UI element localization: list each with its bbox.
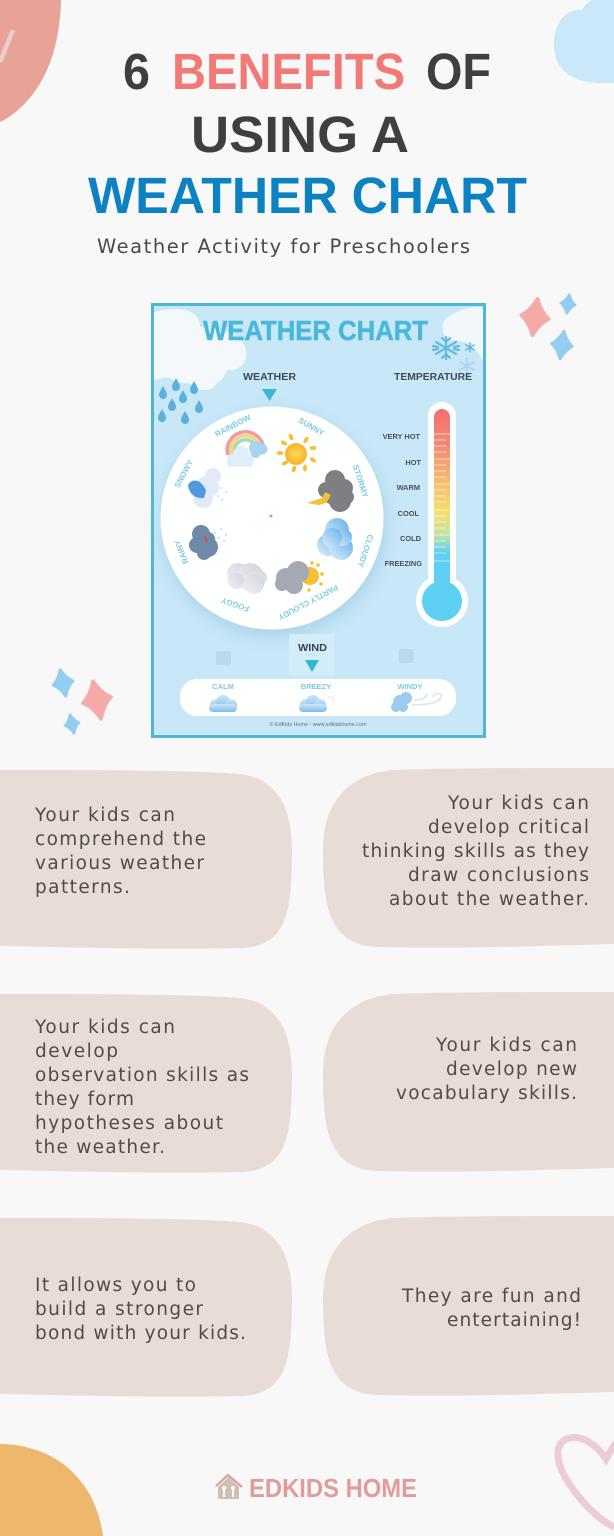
card 2: critical thinking: about the weather. <box>389 889 589 910</box>
wheel label: rainbow: RAINBOW <box>213 412 253 439</box>
panel: weather chart poster <box>152 304 484 736</box>
label: weather: WEATHER <box>243 372 297 383</box>
temperature scale labels: HOT <box>405 458 421 467</box>
card 1: weather patterns: comprehend the <box>35 829 206 850</box>
icon: sun <box>276 433 317 473</box>
wind strip <box>180 679 456 716</box>
icon: windy cloud <box>391 692 441 712</box>
card 6: fun and entertaining <box>323 1216 614 1396</box>
temperature scale labels: WARM <box>397 483 420 492</box>
card 5: stronger bond: bond with your kids. <box>35 1323 246 1344</box>
card 6: fun and entertaining: They are fun and <box>401 1286 581 1307</box>
card 6: fun and entertaining: entertaining! <box>447 1310 581 1331</box>
sparkles: lower left <box>50 668 115 735</box>
card 3: observation skills: they form <box>35 1089 134 1110</box>
wheel label: sunny: SUNNY <box>297 416 326 438</box>
icon: blue cloud <box>317 518 353 560</box>
weather wheel <box>160 406 384 630</box>
thermometer <box>416 402 468 627</box>
wind tab: WIND <box>298 643 327 654</box>
icon: snow cloud <box>188 468 227 508</box>
title: BENEFITS <box>172 43 405 100</box>
card 3: observation skills: hypotheses about <box>35 1113 223 1134</box>
wind label: windy: WINDY <box>398 682 422 691</box>
card 3: observation skills: observation skills as <box>35 1065 249 1086</box>
title: USING A <box>191 106 409 163</box>
card 5: stronger bond <box>0 1218 292 1397</box>
sparkles: upper right <box>519 293 577 360</box>
card 4: vocabulary skills: Your kids can <box>435 1035 577 1056</box>
copyright line: © EdKids Home - www.edkidshome.com <box>270 721 367 728</box>
card 4: vocabulary skills: vocabulary skills. <box>396 1083 577 1104</box>
card 1: weather patterns: Your kids can <box>34 805 175 826</box>
card 2: critical thinking: Your kids can <box>447 793 589 814</box>
card 4: vocabulary skills <box>323 992 614 1172</box>
card 3: observation skills: develop <box>35 1041 118 1062</box>
card 2: critical thinking: thinking skills as they <box>362 841 589 862</box>
title: OF <box>426 43 491 100</box>
icon: white cloud top right <box>443 308 483 360</box>
temperature scale labels: COLD <box>400 534 422 543</box>
subtitle: Weather Activity for Preschoolers <box>97 235 470 258</box>
wheel label: foggy: FOGGY <box>219 595 250 613</box>
card 1: weather patterns: various weather <box>35 853 204 874</box>
label: temperature: TEMPERATURE <box>394 372 472 383</box>
decorative cloud: top right blue <box>554 0 614 83</box>
slot squares <box>216 649 414 665</box>
icon: storm cloud <box>307 470 354 512</box>
decorative blob: bottom left orange <box>0 1444 103 1536</box>
wind label: breezy: BREEZY <box>301 682 331 691</box>
card 5: stronger bond: build a stronger <box>35 1299 203 1320</box>
title: 6 <box>123 43 150 100</box>
card 2: critical thinking <box>323 768 614 948</box>
marker: weather arrow <box>262 389 277 401</box>
icon: rain drops <box>158 378 203 424</box>
title: WEATHER CHART <box>88 167 527 224</box>
temperature scale labels: VERY HOT <box>383 432 420 441</box>
title <box>88 43 527 224</box>
icon: fog cloud <box>227 563 267 594</box>
icon: white cloud top left <box>154 309 246 390</box>
wheel label: partly cloudy: PARTLY CLOUDY <box>276 583 340 622</box>
temperature scale labels: FREEZING <box>385 559 422 568</box>
wind tab <box>289 634 334 675</box>
temperature scale labels <box>383 432 422 568</box>
card 2: critical thinking: develop critical <box>428 817 589 838</box>
temperature scale labels: COOL <box>398 509 419 518</box>
card 4: vocabulary skills: develop new <box>446 1059 577 1080</box>
icon: breezy cloud <box>299 695 334 712</box>
wheel label: snowy: SNOWY <box>173 458 195 489</box>
wheel label: stormy: STORMY <box>351 464 370 499</box>
icon: calm cloud <box>209 695 237 712</box>
card 1: weather patterns: patterns. <box>35 877 130 898</box>
card 3: observation skills: the weather. <box>35 1137 165 1158</box>
card 3: observation skills: Your kids can <box>34 1017 175 1038</box>
wheel shadow <box>162 413 386 637</box>
card 3: observation skills <box>0 994 292 1173</box>
icon: snowflakes <box>433 337 474 374</box>
chart title: WEATHER CHART <box>203 315 428 346</box>
icon: house <box>216 1475 242 1499</box>
icon: rainbow cloud <box>227 432 268 467</box>
wheel label: rainy: RAINY <box>173 538 191 565</box>
decorative blob: top left salmon <box>0 0 61 122</box>
card 2: critical thinking: draw conclusions <box>408 865 589 886</box>
card 1: weather patterns <box>0 770 292 949</box>
card 5: stronger bond: It allows you to <box>35 1275 196 1296</box>
icon: rain cloud <box>189 525 227 560</box>
wheel label: cloudy: CLOUDY <box>356 533 375 569</box>
icon: partly cloudy <box>275 561 324 594</box>
decorative heart outline <box>558 1438 614 1527</box>
logo: Edkids Home: EDKIDS HOME <box>249 1473 417 1503</box>
wind label: calm: CALM <box>212 682 234 691</box>
